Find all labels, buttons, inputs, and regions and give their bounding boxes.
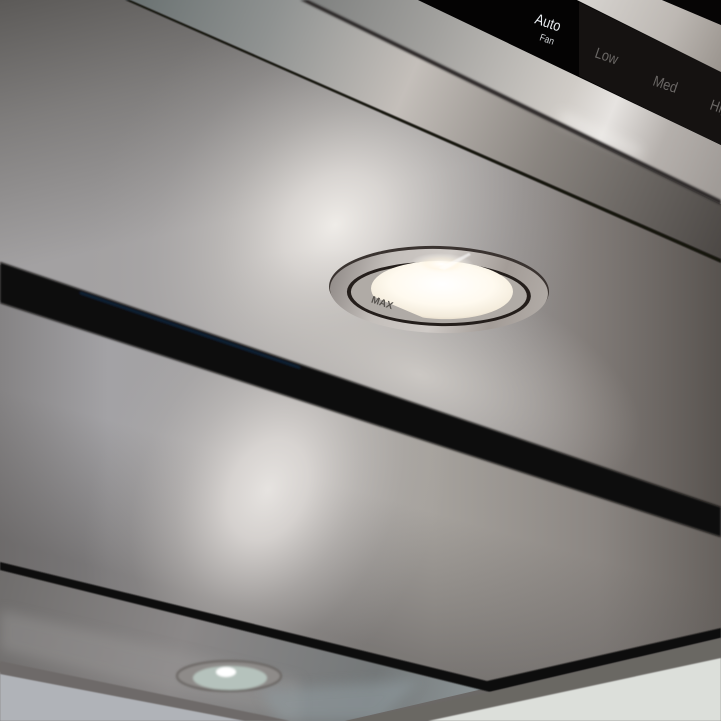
lamp inner dark ring: [346, 260, 532, 328]
panel: main hood surface: [0, 0, 721, 521]
right grey trim under seam: [345, 638, 721, 721]
main lamp fixture: [328, 243, 550, 336]
bottom black seam: [0, 562, 721, 692]
lamp trim ring: [329, 246, 549, 336]
lamp trim ring outer shadow: [328, 243, 550, 335]
black recessed channel: [0, 262, 721, 537]
control panel lighter section: [579, 2, 721, 145]
small reflected lamp: [177, 661, 281, 691]
label: Low: Low: [593, 44, 621, 68]
trim strip edge highlight: [560, 112, 640, 156]
panel: steel trim strip: [304, 0, 721, 204]
panel: top right steel strip: [577, 0, 721, 72]
grey trim lower left: [0, 661, 290, 721]
lamp lens: [370, 259, 514, 321]
bottom left pale wall: [0, 672, 267, 721]
lamp glint: [409, 252, 474, 276]
channel black core: [0, 262, 721, 537]
reflection: blue-grey window: [271, 680, 410, 721]
bottom right light wall: [428, 658, 721, 721]
control panel glass: [418, 0, 721, 145]
top right dark corner: [662, 0, 721, 25]
small lamp ring: [177, 661, 281, 691]
control panel: [418, 0, 721, 145]
lamp embossed label: MAX: [370, 295, 395, 312]
panel: mirrored lower reflective panel: [0, 575, 481, 721]
lamp silver bezel: [350, 263, 528, 325]
small lamp lens: [193, 666, 267, 690]
panel: upper steel band: [125, 0, 721, 262]
label: Fan: Fan: [538, 32, 556, 47]
channel blue reflection line: [80, 292, 300, 368]
lamp star flare: [439, 252, 471, 271]
small lamp highlight: [216, 667, 236, 677]
reflection: pale band: [0, 612, 293, 708]
label: Auto: Auto: [533, 10, 564, 35]
divider line: trim seam: [300, 0, 721, 205]
label: Med: Med: [651, 72, 680, 96]
divider line: upper seam: [125, 0, 721, 263]
panel: lower hood surface: [0, 300, 721, 700]
